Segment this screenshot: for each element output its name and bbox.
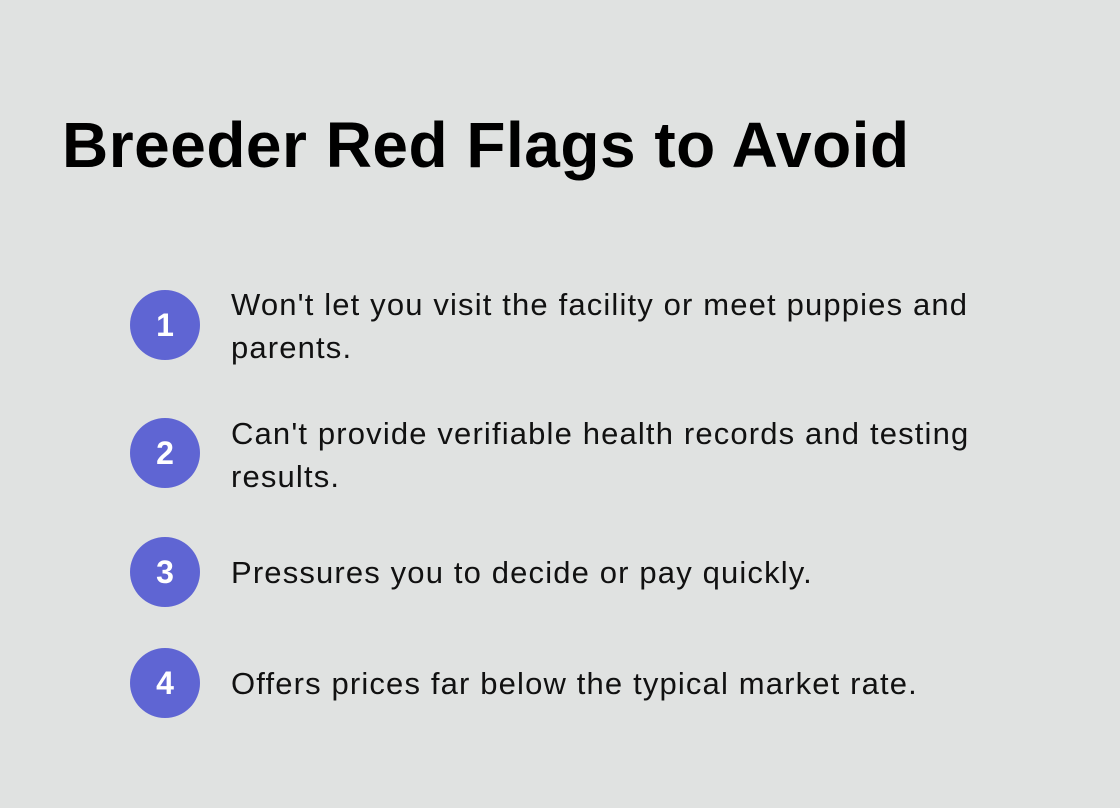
item 3 <box>130 537 813 607</box>
icon: number 4: 4 <box>156 665 174 701</box>
icon: number 2: 2 <box>156 435 174 471</box>
text 2 <box>231 416 969 494</box>
text 2: results. <box>231 459 340 494</box>
text 3: Pressures you to decide or pay quickly. <box>231 555 813 590</box>
title: Breeder Red Flags to Avoid <box>62 109 910 181</box>
text 1: parents. <box>231 330 352 365</box>
item 1 <box>130 287 968 365</box>
icon: number 4 <box>130 648 200 718</box>
icon: number 3: 3 <box>156 554 174 590</box>
text 2: Can't provide verifiable health records and testing <box>231 416 969 451</box>
icon: number 2 <box>130 418 200 488</box>
text 1 <box>231 287 968 365</box>
icon: number 3 <box>130 537 200 607</box>
item 2 <box>130 416 969 494</box>
text 4: Offers prices far below the typical market rate. <box>231 666 918 701</box>
icon: number 1 <box>130 290 200 360</box>
icon: number 1: 1 <box>156 307 174 343</box>
item 4 <box>130 648 918 718</box>
text 1: Won't let you visit the facility or meet puppies and <box>231 287 968 322</box>
